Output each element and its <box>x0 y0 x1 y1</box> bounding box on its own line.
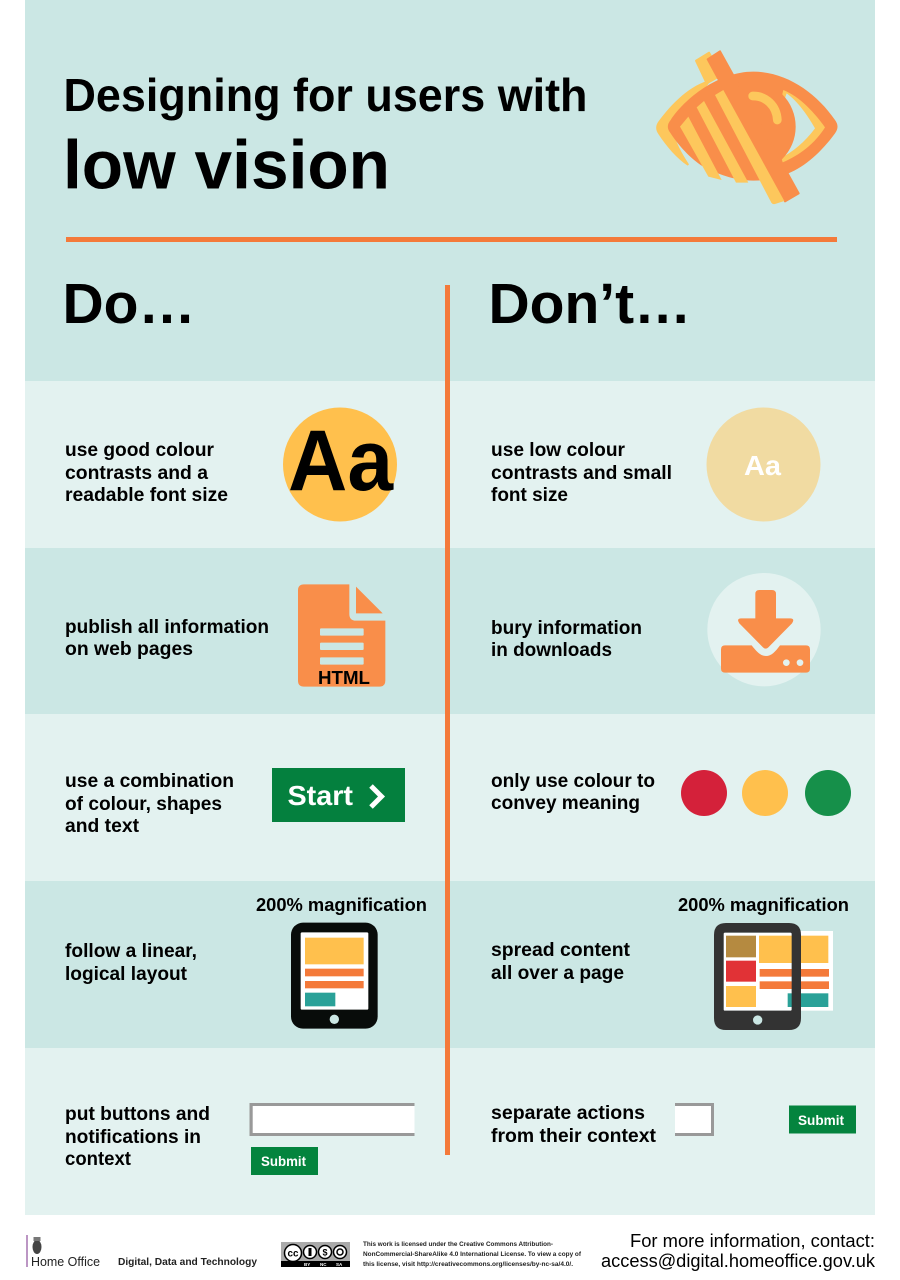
text: do linear layout: logical layout <box>65 963 187 985</box>
icon: low contrast Aa <box>706 408 820 522</box>
text: don't colour only: convey meaning <box>491 792 640 814</box>
label: 200% magnification left: 200% magnification <box>256 894 427 915</box>
text: do context: context <box>65 1148 131 1170</box>
text: don't bury: in downloads <box>491 639 612 661</box>
form: input with adjacent submit: Submit <box>261 1154 306 1169</box>
text: don't spread content: spread content <box>491 939 630 961</box>
text: do combination <box>65 770 234 837</box>
text: do context: put buttons and <box>65 1103 210 1125</box>
text: don't colour only: only use colour to <box>491 770 655 792</box>
footer: Home Office logo <box>26 1235 100 1269</box>
text: do context: notifications in <box>65 1126 201 1148</box>
footer: Home Office logo: Home Office <box>31 1254 100 1269</box>
footer: Creative Commons badge: SA <box>336 1262 343 1267</box>
icon: traffic light circles <box>681 770 851 816</box>
text: don't colour contrast: contrasts and small <box>491 462 672 484</box>
panel: row 4 <box>25 881 875 1048</box>
button: Start <box>272 768 405 822</box>
text: do linear layout: follow a linear, <box>65 940 197 962</box>
text: don't colour contrast: font size <box>491 484 568 506</box>
text: do combination: of colour, shapes <box>65 793 222 815</box>
form: input separated from submit: Submit <box>798 1113 845 1128</box>
divider: vertical rule between columns <box>445 285 450 1155</box>
footer: licence text: This work is licensed under the Creative Commons Attribution- <box>363 1241 553 1248</box>
heading: Don't: Don’t… <box>488 272 691 336</box>
footer: licence text: this license, visit http://creativecommons.org/licenses/by-nc-sa/4.0/. <box>363 1261 573 1268</box>
form: input with adjacent submit <box>250 1103 414 1175</box>
icon: low contrast Aa: Aa <box>744 450 781 481</box>
text: don't colour contrast: use low colour <box>491 439 625 461</box>
text: do colour contrast <box>65 439 228 506</box>
text: don't bury: bury information <box>491 617 642 639</box>
footer: contact information <box>601 1231 876 1271</box>
title: Designing for users with <box>64 69 588 121</box>
text: do colour contrast: contrasts and a <box>65 462 208 484</box>
footer: Digital, Data and Technology: Digital, Data and Technology <box>118 1257 257 1268</box>
text: don't colour only <box>491 770 655 814</box>
text: do colour contrast: use good colour <box>65 439 214 461</box>
icon: HTML document: HTML <box>318 667 370 688</box>
panel: row 1 <box>25 381 875 548</box>
footer: Creative Commons badge: BY <box>304 1262 310 1267</box>
text: do publish: publish all information <box>65 616 269 638</box>
panel: row 2 <box>25 548 875 714</box>
text: do linear layout <box>65 940 197 985</box>
text: do publish: on web pages <box>65 638 193 660</box>
text: don't separate: from their context <box>491 1125 656 1147</box>
button: Start: Start <box>288 780 353 811</box>
footer: Creative Commons badge: NC <box>320 1262 327 1267</box>
text: don't bury <box>491 617 642 661</box>
footer: licence text: NonCommercial-ShareAlike 4.0 International License. To view a copy of <box>363 1251 582 1258</box>
text: do context <box>65 1103 210 1170</box>
footer: licence text <box>363 1241 582 1268</box>
icon: HTML document <box>298 584 385 688</box>
text: do publish <box>65 616 269 660</box>
label: 200% magnification right: 200% magnification <box>678 894 849 915</box>
icon: high contrast Aa: Aa <box>288 413 394 509</box>
icon: crossed-out eye <box>656 51 837 204</box>
title <box>63 69 588 204</box>
panel: header background <box>25 0 875 381</box>
panel: row 5 <box>25 1048 875 1215</box>
footer: contact information: For more information, contact: <box>630 1231 875 1251</box>
footer: contact information: access@digital.homeoffice.gov.uk <box>601 1251 876 1271</box>
form: input separated from submit <box>675 1103 856 1136</box>
text: don't spread content: all over a page <box>491 962 624 984</box>
text: do combination: and text <box>65 815 139 837</box>
text: don't spread content <box>491 939 630 984</box>
text: don't separate: separate actions <box>491 1102 645 1124</box>
footer: Creative Commons badge <box>281 1242 350 1267</box>
panel: row 3 <box>25 714 875 881</box>
text: don't colour contrast <box>491 439 672 506</box>
icon: tablet linear layout <box>291 923 378 1029</box>
icon: download <box>707 573 821 686</box>
title: low vision <box>63 126 390 204</box>
text: don't separate <box>491 1102 656 1147</box>
footer: Creative Commons badge: cc <box>288 1248 299 1260</box>
text: do combination: use a combination <box>65 770 234 792</box>
heading: Do: Do… <box>62 272 195 336</box>
icon: tablet spread layout <box>714 923 833 1030</box>
footer: Creative Commons badge: $ <box>322 1248 328 1258</box>
divider: horizontal rule <box>66 237 837 242</box>
text: do colour contrast: readable font size <box>65 484 228 506</box>
